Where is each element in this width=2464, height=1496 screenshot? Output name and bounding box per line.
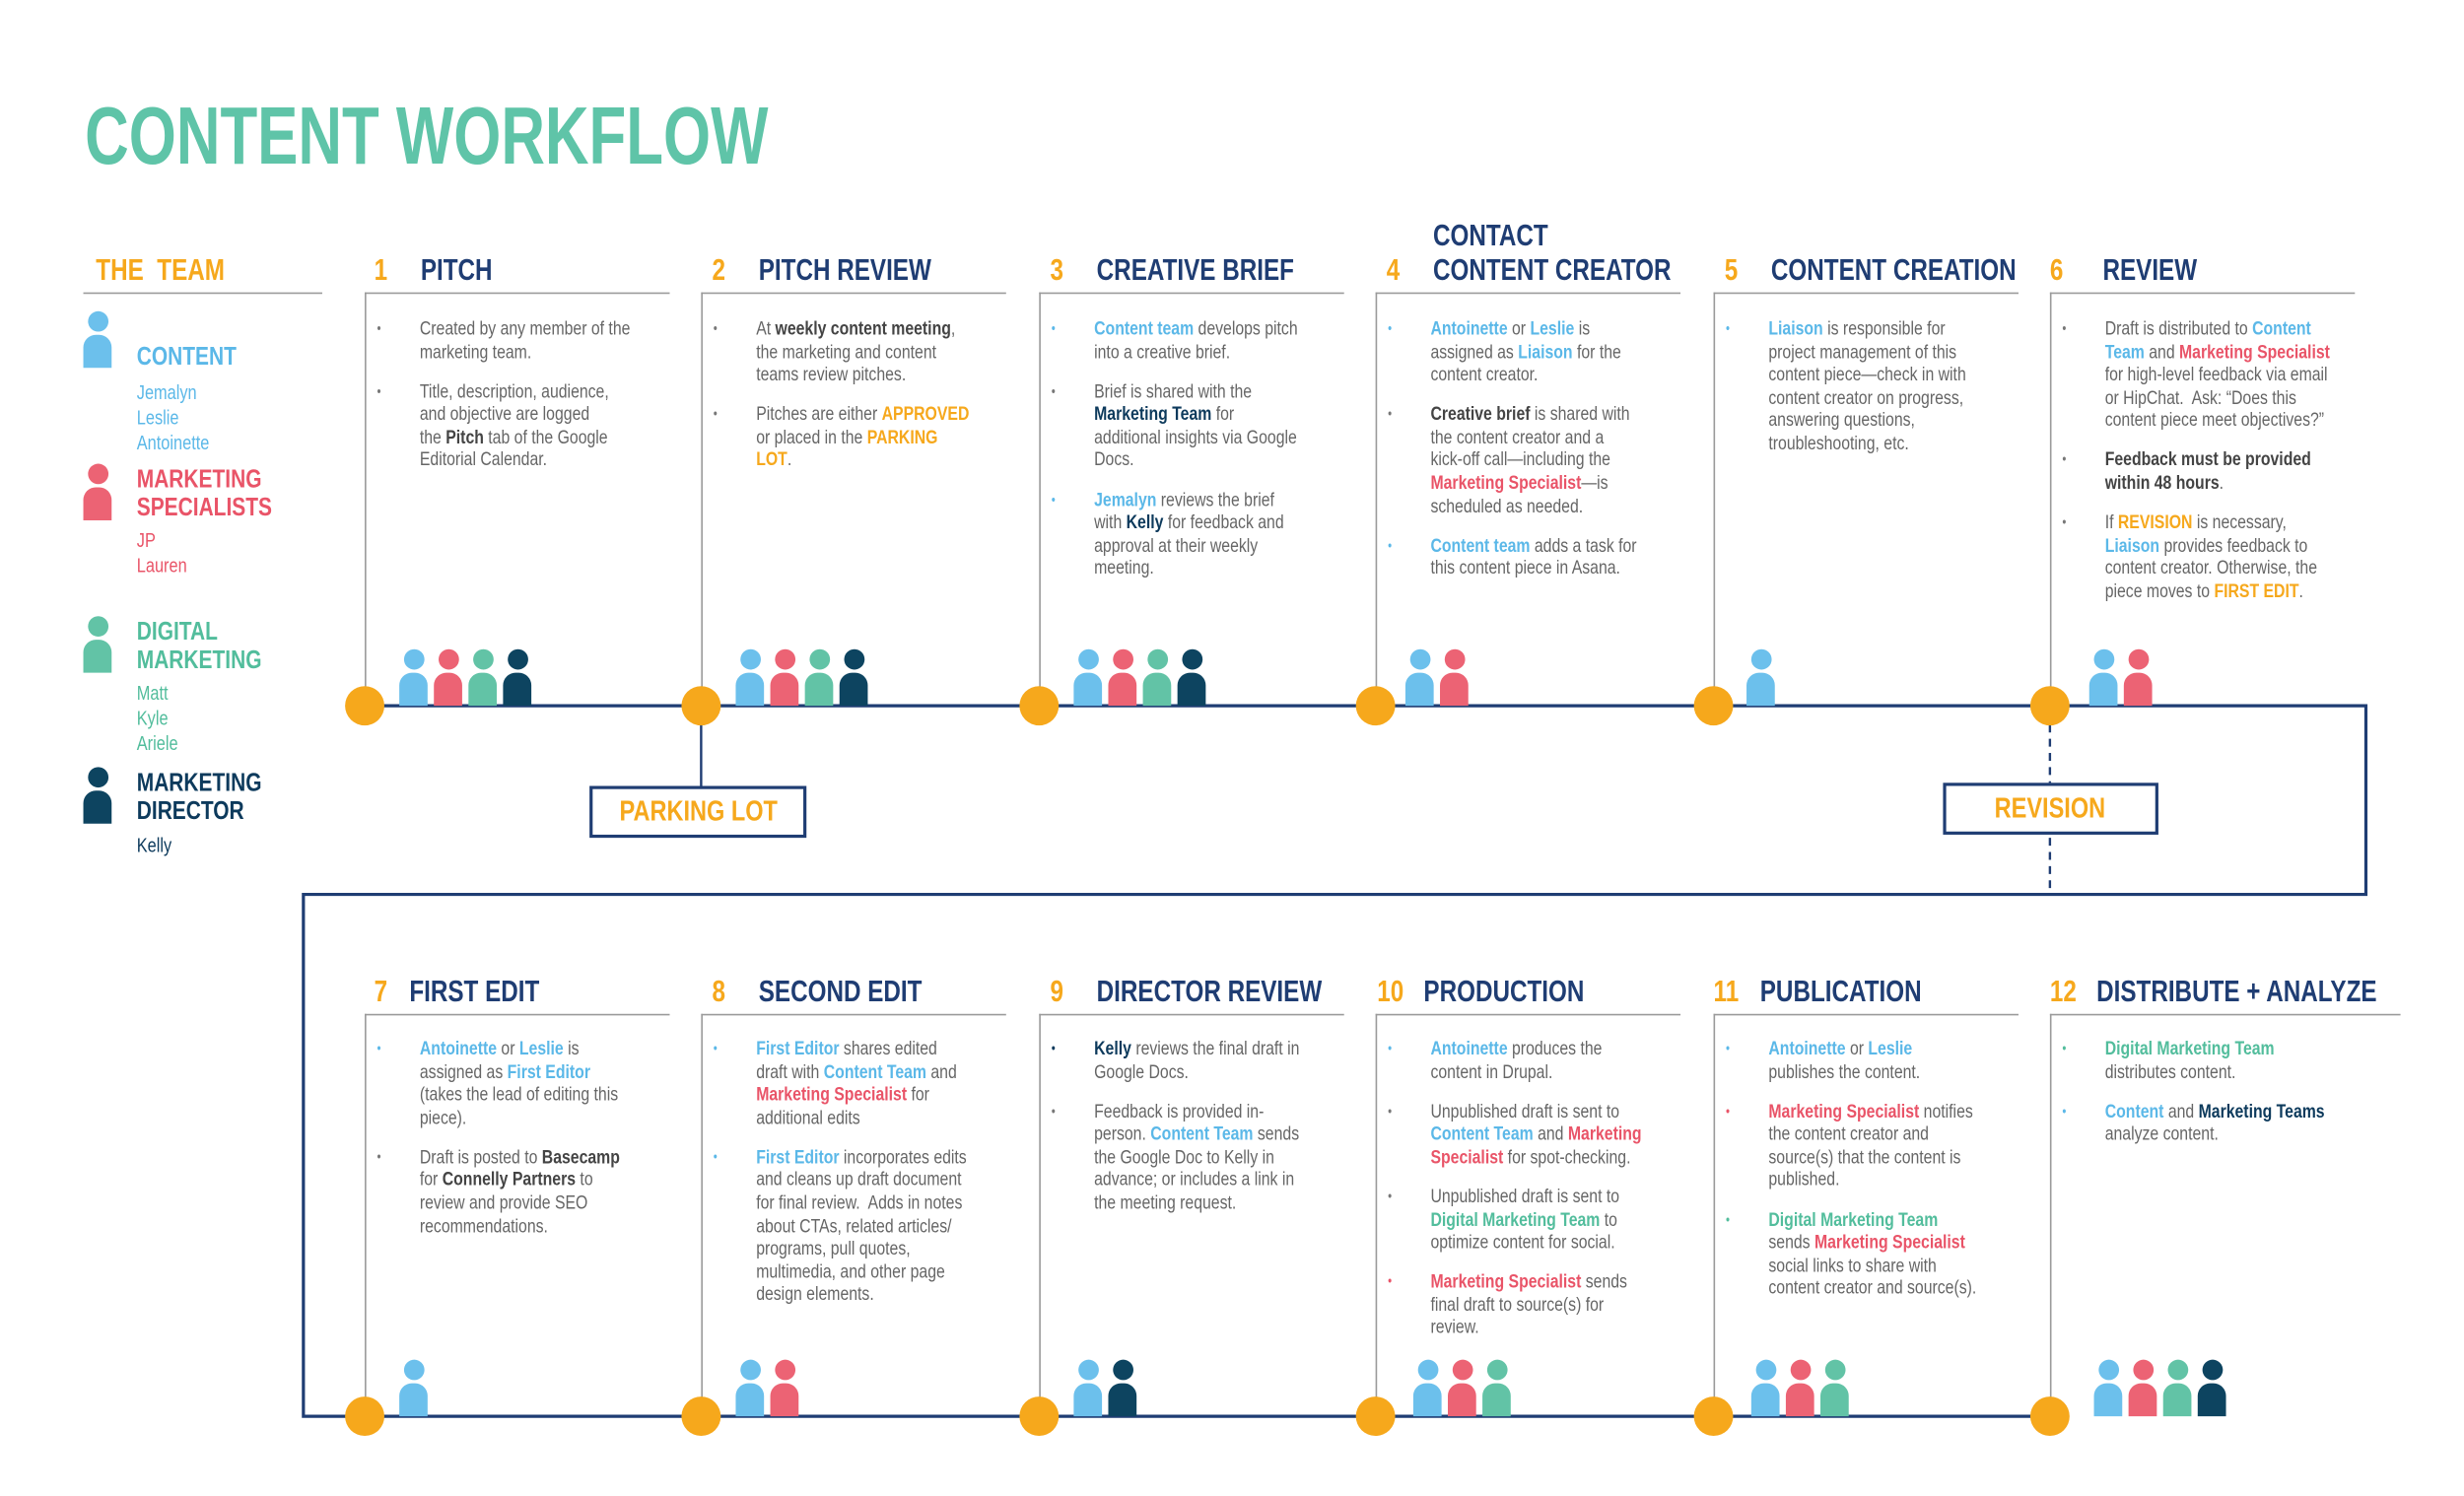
step 4: contact content creator: Content team adds a task for: [1430, 534, 1637, 556]
step 1: pitch: marketing team.: [420, 340, 531, 363]
step 10: production: Unpublished draft is sent to: [1430, 1186, 1619, 1207]
title: CONTENT WORKFLOW: [85, 92, 768, 182]
step 1: pitch: the Pitch tab of the Google: [420, 426, 608, 447]
step 8: second edit: multimedia, and other page: [756, 1260, 945, 1282]
step 6: review: piece moves to FIRST EDIT.: [2105, 579, 2303, 602]
step 10: production: content in Drupal.: [1430, 1060, 1552, 1082]
icon: director person: [84, 767, 111, 824]
step 1: pitch: [365, 254, 670, 706]
step 10: production: •: [1388, 1189, 1392, 1204]
heading: the team: THE TEAM: [96, 254, 225, 288]
step 4: contact content creator: the content creator and a: [1430, 426, 1604, 447]
step 5: content creation: content piece—check in with: [1768, 364, 1966, 385]
step 11: publication: source(s) that the content is: [1768, 1146, 1960, 1168]
icon: digital marketing person: [84, 616, 111, 673]
step 3: creative brief: Content team develops pitch: [1094, 317, 1298, 340]
step 4: contact content creator: Antoinette or Leslie is: [1430, 317, 1590, 340]
step 6: review: •: [2062, 514, 2066, 530]
step 7: first edit: •: [376, 1041, 381, 1056]
step 7: first edit: review and provide SEO: [420, 1191, 587, 1213]
step 8: second edit: SECOND EDIT: [759, 976, 922, 1009]
step 8: second edit: •: [714, 1149, 718, 1165]
step 8: second edit: additional edits: [756, 1107, 860, 1128]
step 6: review: within 48 hours.: [2105, 472, 2224, 494]
step 6: review: •: [2062, 320, 2066, 336]
step 10: production: Content Team and Marketing: [1430, 1122, 1642, 1145]
step 6: review: content creator. Otherwise, the: [2105, 557, 2317, 579]
step 8: second edit: First Editor incorporates edits: [756, 1146, 967, 1168]
step 9: director review: advance; or includes a link in: [1094, 1169, 1294, 1190]
step 11: publication: •: [1726, 1041, 1730, 1056]
step 7: first edit: Antoinette or Leslie is: [420, 1038, 580, 1059]
step 10: production: review.: [1430, 1317, 1479, 1338]
step 3: creative brief: •: [1052, 383, 1056, 399]
team: marketing director: DIRECTOR: [137, 798, 244, 825]
team: marketing specialists: [137, 467, 272, 522]
step 11: publication: 11: [1714, 976, 1739, 1009]
step 4: contact content creator: Creative brief is shared with: [1430, 403, 1630, 425]
step 10: production: final draft to source(s) for: [1430, 1293, 1604, 1316]
names: content: Antoinette: [137, 433, 209, 454]
step 3: creative brief: Jemalyn reviews the brief: [1094, 488, 1274, 510]
step 2: pitch review: •: [714, 406, 718, 422]
step 3: creative brief: meeting.: [1094, 557, 1154, 579]
step 7: first edit: 7: [375, 976, 387, 1009]
team: marketing director: [137, 771, 261, 825]
step 10: production: Unpublished draft is sent to: [1430, 1100, 1619, 1122]
step 3: creative brief: [1039, 254, 1344, 706]
step 1: pitch: 1: [375, 254, 387, 288]
step 10: production: Specialist for spot-checking.: [1430, 1146, 1630, 1168]
step 2: pitch review: [701, 254, 1006, 706]
team: content: CONTENT: [137, 344, 237, 371]
step 9: director review: Feedback is provided in-: [1094, 1100, 1264, 1122]
team: marketing specialists: MARKETING: [137, 467, 261, 494]
step 10: production: •: [1388, 1041, 1392, 1056]
step 4: contact content creator: this content piece in Asana.: [1430, 557, 1620, 579]
step 6: review: Team and Marketing Specialist: [2105, 340, 2330, 363]
step 4: contact content creator: •: [1388, 320, 1392, 336]
step 3: creative brief: •: [1052, 492, 1056, 507]
step 11: publication: [1713, 976, 2019, 1417]
step 9: director review: [1039, 976, 1344, 1417]
step 4: contact content creator: •: [1388, 537, 1392, 553]
step 1: pitch: PITCH: [421, 254, 493, 288]
step 8: second edit: Marketing Specialist for: [756, 1083, 929, 1106]
step 12: distribute + analyze: •: [2062, 1103, 2066, 1119]
step 11: publication: social links to share with: [1768, 1254, 1937, 1276]
step 10: production: •: [1388, 1273, 1392, 1289]
step 2: pitch review: 2: [713, 254, 725, 288]
step 8: second edit: about CTAs, related articles/: [756, 1214, 952, 1237]
step 4: contact content creator: assigned as Liaison for the: [1430, 340, 1621, 363]
step 3: creative brief: with Kelly for feedback and: [1094, 511, 1284, 533]
step 1: pitch: Editorial Calendar.: [420, 448, 547, 471]
step 3: creative brief: CREATIVE BRIEF: [1097, 254, 1294, 288]
step 4: contact content creator: [1376, 220, 1681, 706]
step 2: pitch review: the marketing and content: [756, 340, 936, 363]
names: content: [136, 382, 209, 454]
step 6: review: If REVISION is necessary,: [2105, 511, 2287, 533]
team: digital marketing: MARKETING: [137, 647, 261, 674]
step 2: pitch review: PITCH REVIEW: [759, 254, 931, 288]
step 10: production: •: [1388, 1103, 1392, 1119]
step 12: distribute + analyze: 12: [2050, 976, 2077, 1009]
step 10: production: optimize content for social.: [1430, 1231, 1615, 1253]
step 5: content creation: •: [1726, 320, 1730, 336]
team: digital marketing: [137, 619, 261, 674]
step 8: second edit: programs, pull quotes,: [756, 1238, 911, 1259]
step 10: production: Marketing Specialist sends: [1430, 1270, 1627, 1292]
step 11: publication: publishes the content.: [1768, 1060, 1920, 1082]
step 4: contact content creator: CONTENT CREATOR: [1433, 254, 1672, 288]
step 4: contact content creator: kick-off call—including the: [1430, 448, 1610, 471]
names: digital: [136, 682, 178, 755]
team: digital marketing: DIGITAL: [137, 619, 218, 646]
names: digital: Ariele: [137, 732, 178, 755]
step 11: publication: •: [1726, 1211, 1730, 1227]
step 1: pitch: Created by any member of the: [420, 317, 630, 340]
step 12: distribute + analyze: DISTRIBUTE + ANALYZE: [2096, 976, 2377, 1009]
step 12: distribute + analyze: [2050, 976, 2401, 1417]
step 12: distribute + analyze: analyze content.: [2105, 1122, 2219, 1145]
step 3: creative brief: into a creative brief.: [1094, 340, 1230, 363]
step 2: pitch review: teams review pitches.: [756, 364, 906, 385]
step 2: pitch review: or placed in the PARKING: [756, 426, 937, 447]
step 4: contact content creator: CONTACT: [1433, 220, 1548, 253]
step 3: creative brief: Docs.: [1094, 448, 1134, 471]
step 9: director review: DIRECTOR REVIEW: [1097, 976, 1322, 1009]
panel: the team: [83, 254, 322, 856]
step 3: creative brief: approval at their weekly: [1094, 534, 1258, 556]
step 9: director review: Kelly reviews the final draft in: [1094, 1038, 1299, 1059]
step 6: review: •: [2062, 452, 2066, 467]
names: content: Jemalyn: [137, 382, 197, 404]
step 10: production: 10: [1377, 976, 1403, 1009]
step 9: director review: •: [1052, 1103, 1056, 1119]
step 12: distribute + analyze: Content and Marketing Teams: [2105, 1100, 2325, 1122]
step 5: content creation: answering questions,: [1768, 409, 1915, 432]
team: marketing director: MARKETING: [137, 771, 261, 797]
step 9: director review: the meeting request.: [1094, 1191, 1236, 1213]
step 10: production: PRODUCTION: [1423, 976, 1584, 1009]
step 10: production: Antoinette produces the: [1430, 1038, 1602, 1059]
step 8: second edit: •: [714, 1041, 718, 1056]
step 6: review: Liaison provides feedback to: [2105, 534, 2307, 556]
step 4: contact content creator: 4: [1387, 254, 1400, 288]
step 12: distribute + analyze: distributes content.: [2105, 1060, 2235, 1082]
names: content: Leslie: [137, 407, 178, 429]
team: marketing specialists: SPECIALISTS: [137, 495, 272, 522]
names: specialists: [137, 530, 187, 577]
step 10: production: [1376, 976, 1681, 1417]
step 7: first edit: recommendations.: [420, 1214, 548, 1237]
step 5: content creation: project management of this: [1768, 340, 1956, 363]
step 8: second edit: First Editor shares edited: [756, 1038, 937, 1059]
step 8: second edit: 8: [713, 976, 725, 1009]
step 12: distribute + analyze: •: [2062, 1041, 2066, 1056]
names: specialists: Lauren: [137, 555, 187, 577]
step 11: publication: published.: [1768, 1169, 1839, 1190]
step 7: first edit: assigned as First Editor: [420, 1060, 590, 1082]
step 5: content creation: Liaison is responsible for: [1768, 317, 1946, 340]
step 4: contact content creator: scheduled as needed.: [1430, 495, 1583, 516]
callout: parking lot: PARKING LOT: [619, 795, 777, 827]
step 8: second edit: for final review. Adds in notes: [756, 1191, 962, 1213]
step 3: creative brief: Marketing Team for: [1094, 403, 1234, 425]
step 12: distribute + analyze: Digital Marketing Team: [2105, 1038, 2275, 1059]
step 7: first edit: •: [376, 1149, 381, 1165]
step 5: content creation: [1713, 254, 2019, 706]
step 7: first edit: [365, 976, 670, 1417]
step 3: creative brief: Brief is shared with the: [1094, 379, 1252, 402]
step 3: creative brief: additional insights via Google: [1094, 426, 1297, 447]
step 11: publication: •: [1726, 1103, 1730, 1119]
step 2: pitch review: At weekly content meeting,: [756, 317, 955, 340]
step 7: first edit: (takes the lead of editing this: [420, 1083, 618, 1106]
icon: content person: [84, 311, 111, 368]
names: specialists: JP: [137, 530, 156, 552]
step 3: creative brief: 3: [1050, 254, 1063, 288]
step 8: second edit: and cleans up draft document: [756, 1169, 962, 1190]
step 8: second edit: draft with Content Team and: [756, 1060, 957, 1082]
step 8: second edit: design elements.: [756, 1283, 874, 1306]
step 11: publication: PUBLICATION: [1760, 976, 1922, 1009]
step 5: content creation: content creator on progress,: [1768, 386, 1963, 408]
step 6: review: [2050, 254, 2356, 706]
step 2: pitch review: •: [714, 320, 718, 336]
icon: marketing specialist person: [84, 464, 111, 520]
step 4: contact content creator: Marketing Specialist—is: [1430, 472, 1608, 494]
step 4: contact content creator: •: [1388, 406, 1392, 422]
step 9: director review: •: [1052, 1041, 1056, 1056]
step 9: director review: 9: [1050, 976, 1063, 1009]
step 5: content creation: 5: [1725, 254, 1738, 288]
step 6: review: REVIEW: [2102, 254, 2197, 288]
step 2: pitch review: LOT.: [756, 448, 791, 471]
step 1: pitch: and objective are logged: [420, 403, 589, 425]
step 6: review: Draft is distributed to Content: [2105, 317, 2311, 340]
step 2: pitch review: Pitches are either APPROVED: [756, 403, 969, 425]
step 11: publication: Antoinette or Leslie: [1768, 1038, 1912, 1059]
step 11: publication: Digital Marketing Team: [1768, 1208, 1938, 1230]
step 5: content creation: troubleshooting, etc.: [1768, 433, 1909, 454]
step 6: review: for high-level feedback via email: [2105, 364, 2328, 385]
step 4: contact content creator: content creator.: [1430, 364, 1538, 385]
step 1: pitch: •: [376, 383, 381, 399]
step 1: pitch: Title, description, audience,: [420, 379, 609, 402]
step 7: first edit: piece).: [420, 1107, 466, 1128]
names: digital: Kyle: [137, 708, 169, 729]
step 7: first edit: FIRST EDIT: [409, 976, 539, 1009]
callout: revision: [1943, 782, 2158, 835]
callout: parking lot: [589, 786, 806, 838]
step 11: publication: sends Marketing Specialist: [1768, 1231, 1965, 1253]
callout: revision: REVISION: [1995, 792, 2106, 824]
step 1: pitch: •: [376, 320, 381, 336]
step 9: director review: Google Docs.: [1094, 1060, 1189, 1082]
step 3: creative brief: •: [1052, 320, 1056, 336]
step 9: director review: person. Content Team sends: [1094, 1122, 1299, 1145]
step 5: content creation: CONTENT CREATION: [1771, 254, 2017, 288]
step 7: first edit: for Connelly Partners to: [420, 1169, 593, 1190]
names: digital: Matt: [137, 682, 169, 705]
step 6: review: or HipChat. Ask: “Does this: [2105, 386, 2296, 408]
step 7: first edit: Draft is posted to Basecamp: [420, 1146, 620, 1168]
step 6: review: Feedback must be provided: [2105, 448, 2311, 471]
step 9: director review: the Google Doc to Kelly in: [1094, 1146, 1274, 1168]
step 6: review: content piece meet objectives?”: [2105, 409, 2324, 432]
step 10: production: Digital Marketing Team to: [1430, 1208, 1617, 1230]
names: director: Kelly: [137, 835, 171, 856]
step 11: publication: Marketing Specialist notifies: [1768, 1100, 1973, 1122]
step 11: publication: content creator and source(s).: [1768, 1277, 1976, 1299]
step 11: publication: the content creator and: [1768, 1122, 1929, 1145]
step 6: review: 6: [2050, 254, 2063, 288]
step 8: second edit: [701, 976, 1006, 1417]
